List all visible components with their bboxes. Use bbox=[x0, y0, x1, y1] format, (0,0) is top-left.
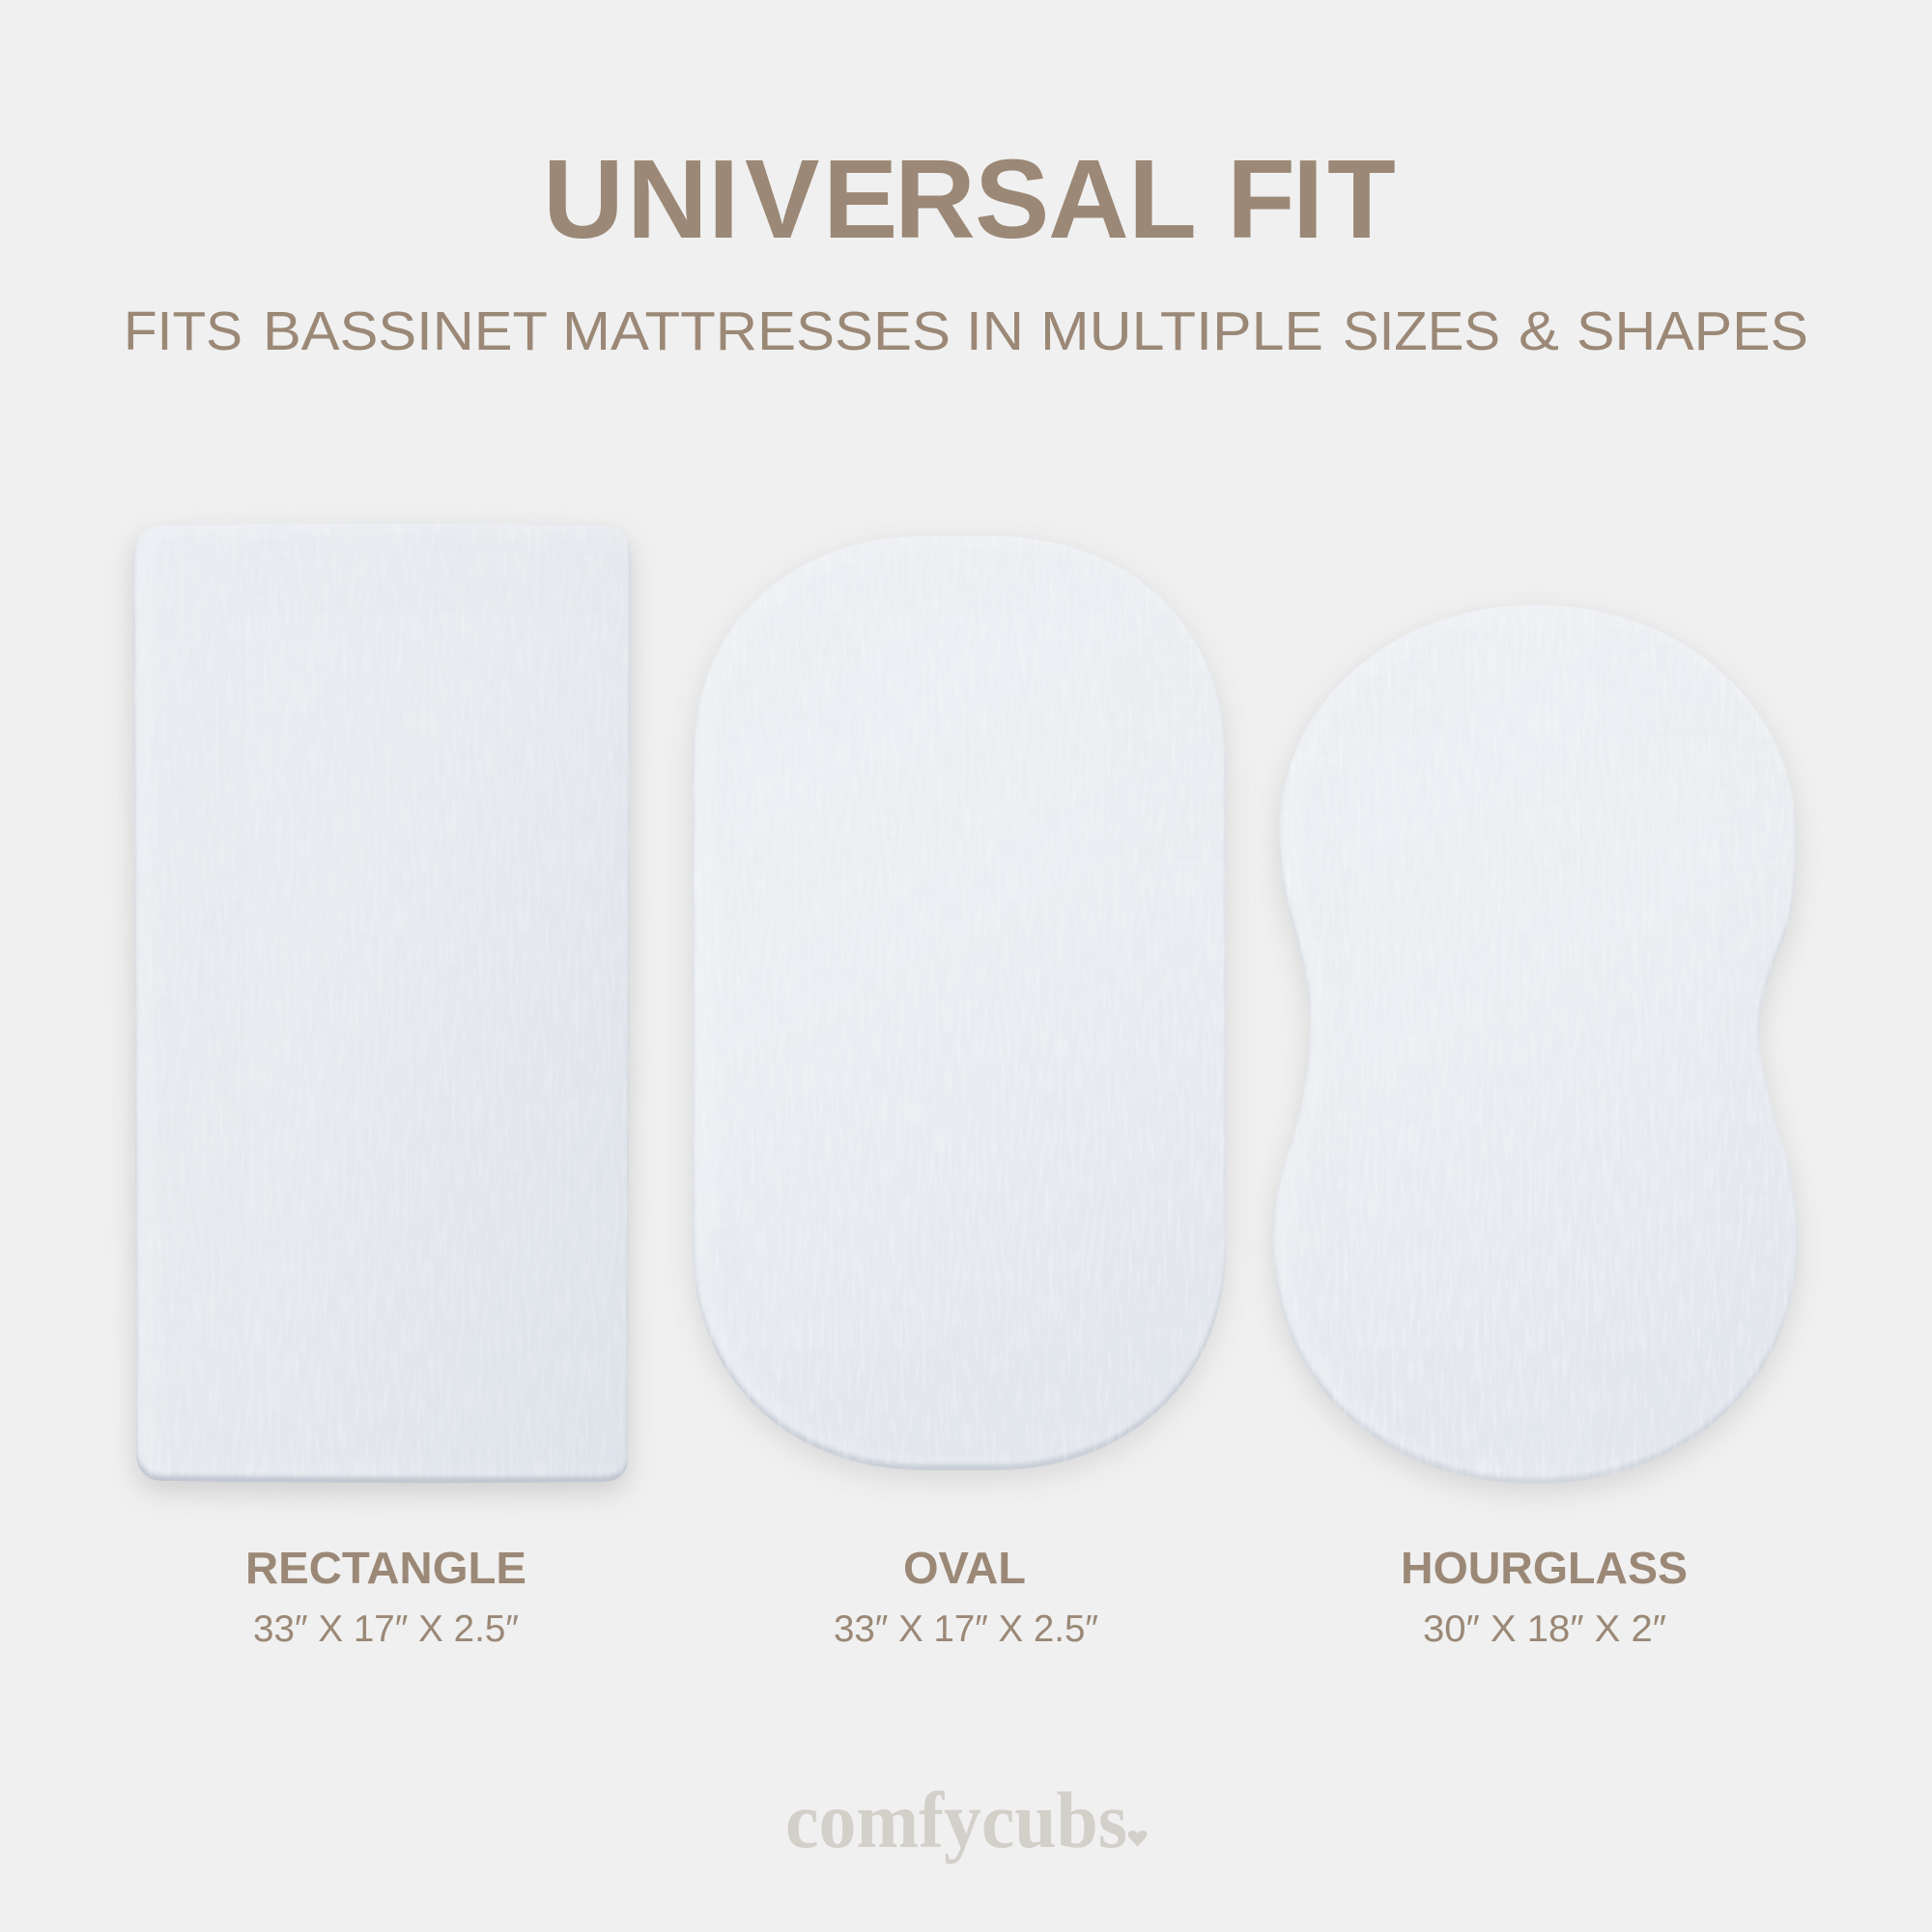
subtitle bbox=[124, 300, 1808, 362]
subtitle: SIZES bbox=[1343, 300, 1500, 362]
panel: rectangle mattress bbox=[133, 518, 640, 1493]
subtitle: SHAPES bbox=[1577, 300, 1808, 362]
subtitle: FITS bbox=[124, 300, 242, 362]
subtitle: MULTIPLE bbox=[1040, 300, 1323, 362]
label: rectangle bbox=[245, 1543, 526, 1650]
subtitle: MATTRESSES bbox=[562, 300, 951, 362]
label: hourglass: HOURGLASS bbox=[1401, 1543, 1688, 1593]
label: rectangle: 33″ X 17″ X 2.5″ bbox=[253, 1608, 519, 1650]
panel: oval mattress bbox=[693, 530, 1236, 1479]
title: UNIVERSAL FIT bbox=[543, 136, 1396, 262]
label: oval bbox=[834, 1543, 1098, 1650]
subtitle: IN bbox=[966, 300, 1024, 362]
panel: hourglass mattress bbox=[1273, 599, 1807, 1492]
subtitle: & bbox=[1519, 300, 1559, 362]
label: oval: OVAL bbox=[903, 1543, 1026, 1593]
label: oval: 33″ X 17″ X 2.5″ bbox=[834, 1608, 1098, 1650]
label: rectangle: RECTANGLE bbox=[245, 1543, 526, 1593]
subtitle: BASSINET bbox=[263, 300, 548, 362]
logo: comfycubs: comfycubs bbox=[785, 1776, 1127, 1864]
label: hourglass: 30″ X 18″ X 2″ bbox=[1423, 1608, 1666, 1650]
label: hourglass bbox=[1401, 1543, 1688, 1650]
